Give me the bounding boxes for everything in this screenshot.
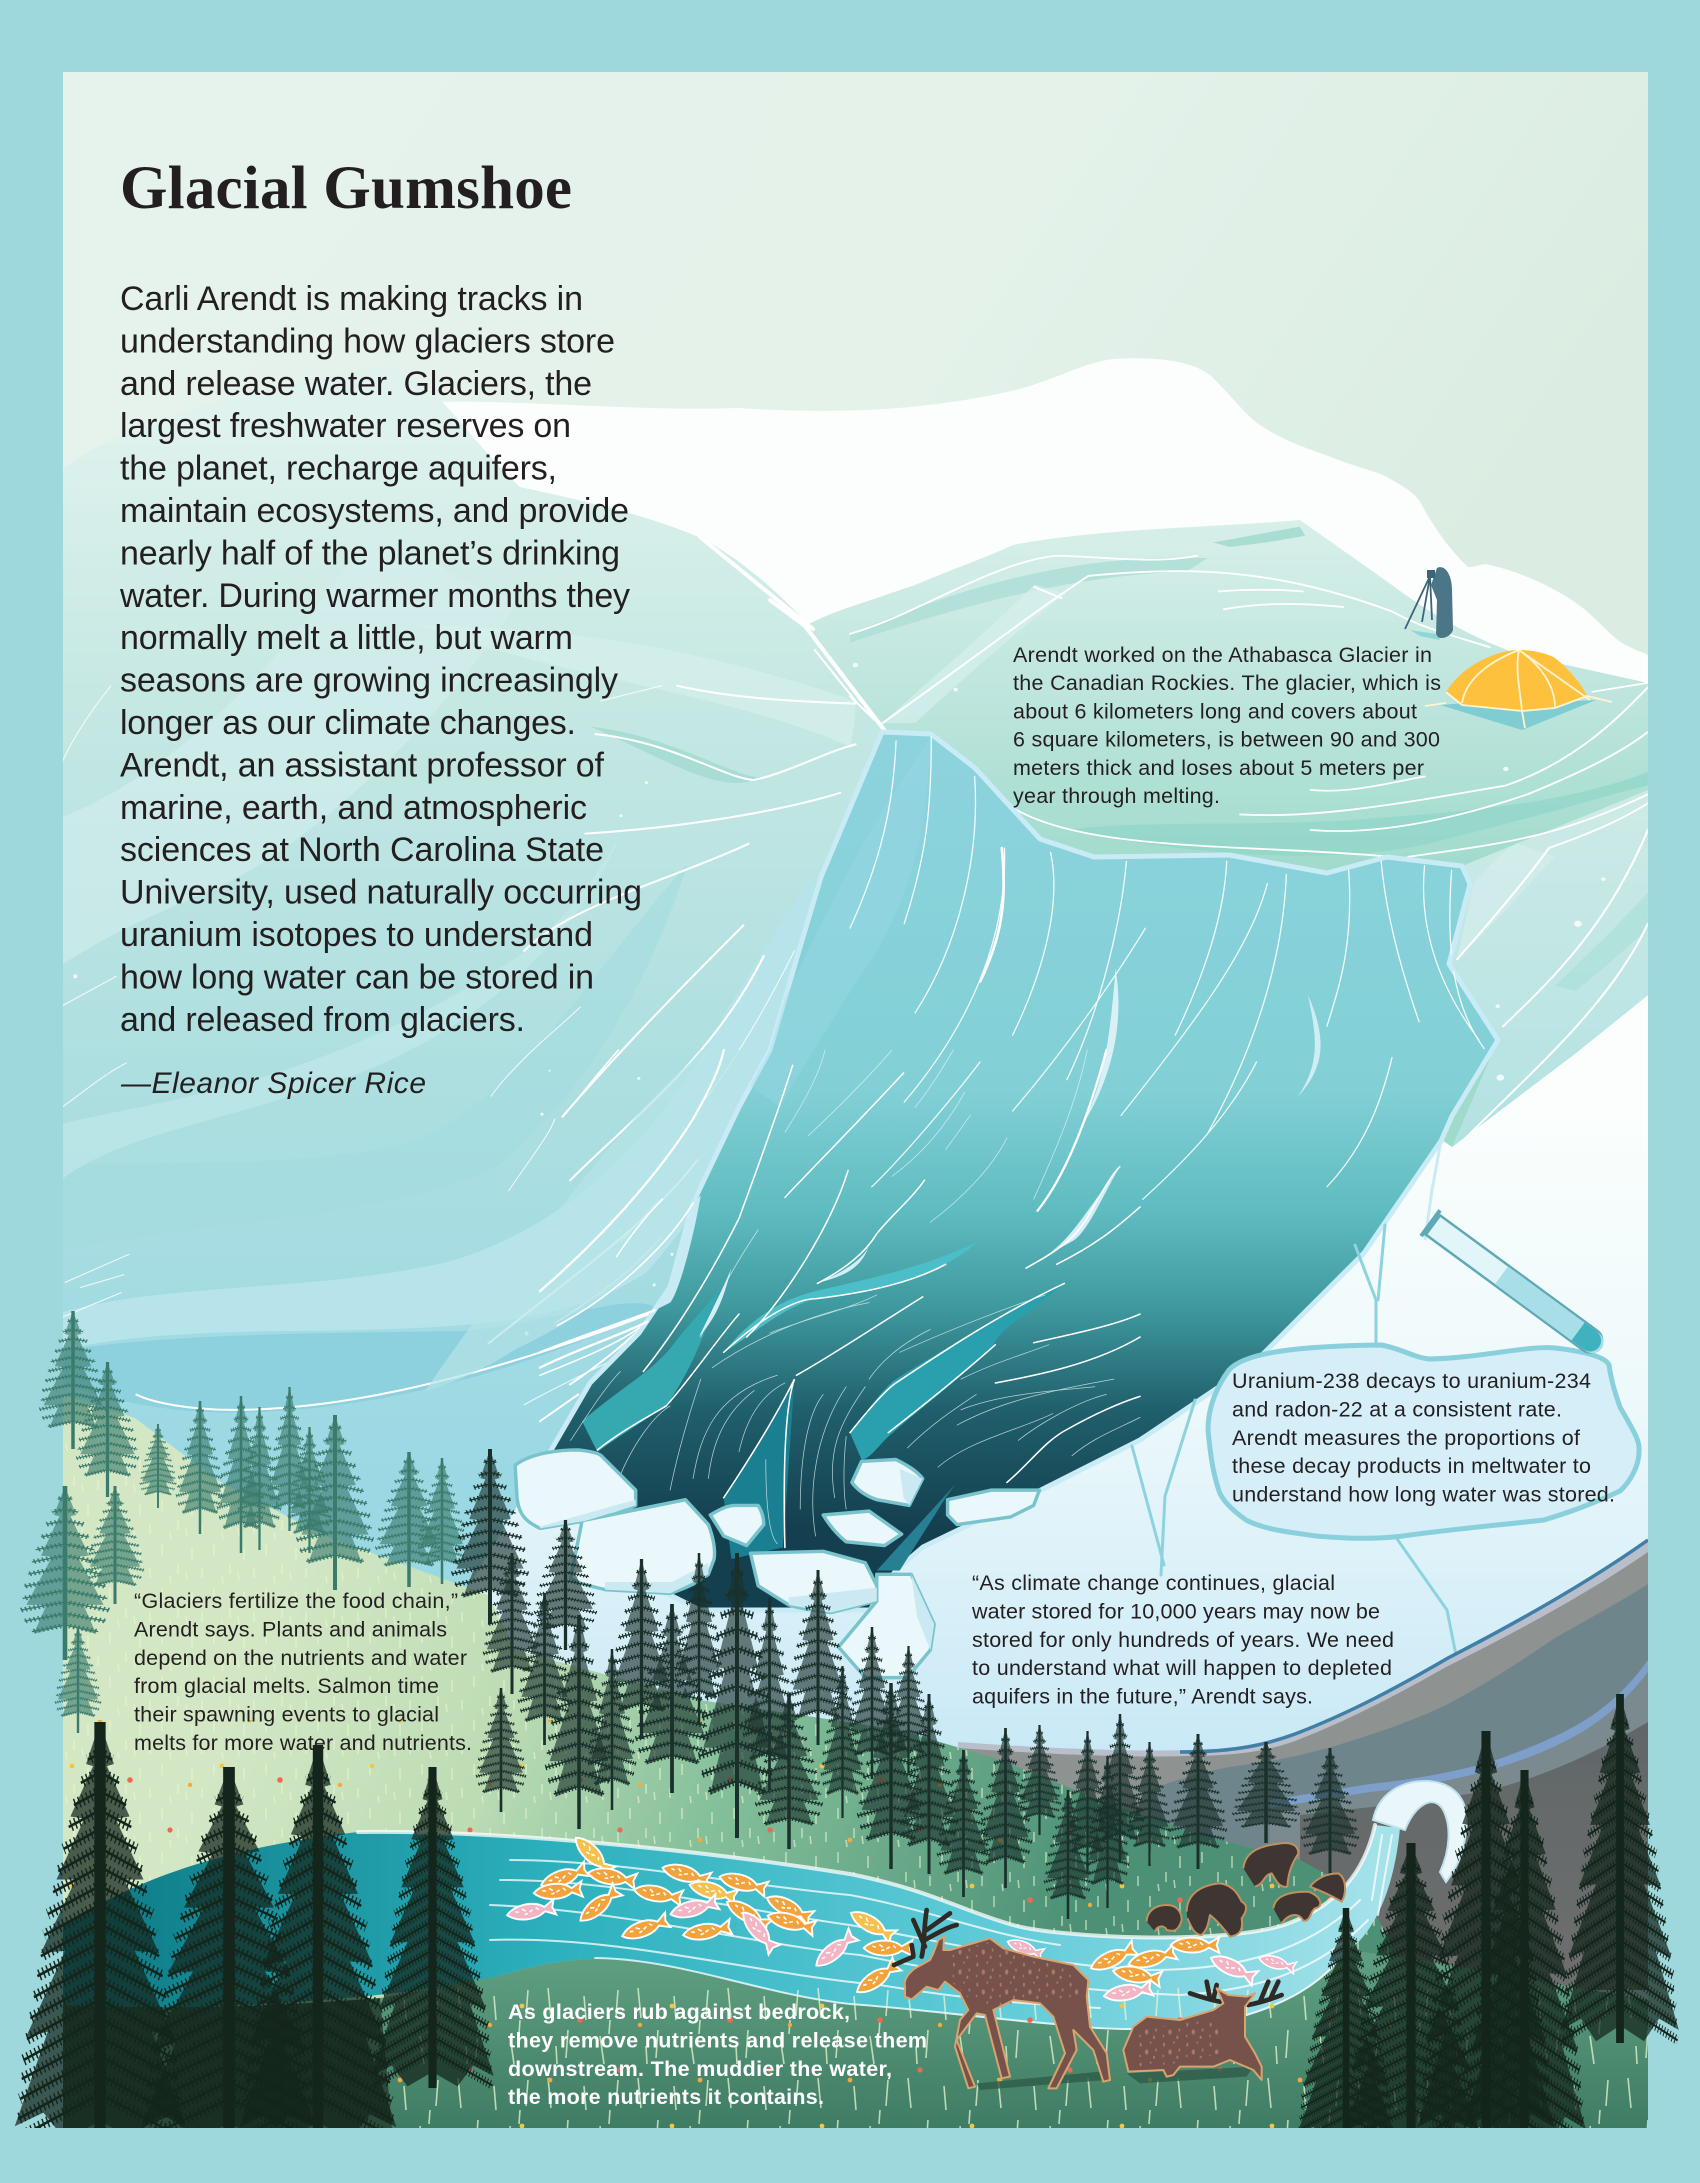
intro text block: maintain ecosystems, and provide [120, 492, 629, 530]
right glacier flank [1449, 790, 1648, 1147]
intro text block: understanding how glaciers store [120, 322, 615, 360]
caption: food chain quote: Arendt says. Plants and animals [134, 1617, 447, 1641]
right glacier surface [805, 520, 1648, 1147]
right glacier crevasses [850, 527, 1648, 1147]
lower ice wall lobes and streaks [425, 1050, 1140, 1570]
intro text block: Carli Arendt is making tracks in [120, 280, 583, 318]
rock strata [958, 1539, 1648, 1990]
intro text block: longer as our climate changes. [120, 704, 576, 742]
caption: food chain quote: “Glaciers fertilize the food chain,” [134, 1589, 458, 1613]
intro text block: water. During warmer months they [119, 577, 630, 615]
dark undergrowth beneath left trees [63, 1998, 392, 2128]
intro text block: sciences at North Carolina State [120, 831, 604, 869]
intro text block: seasons are growing increasingly [120, 662, 618, 700]
caption: Athabasca Glacier [1013, 643, 1441, 808]
lying moose [1123, 1988, 1262, 2080]
sky [63, 72, 1648, 656]
intro text block: University, used naturally occurring [120, 874, 642, 912]
icon: photographer with tripod [1405, 567, 1453, 640]
caption: Athabasca Glacier: the Canadian Rockies. The glacier, which is [1013, 671, 1441, 695]
caption: nutrients in white: the more nutrients it contains. [508, 2085, 824, 2109]
glacier ridge line [700, 537, 885, 731]
caption: nutrients in white [508, 2000, 927, 2109]
lower riverbank [380, 1950, 1648, 2128]
caption: nutrients in white: downstream. The muddier the water, [508, 2057, 892, 2081]
caption: uranium decay: Uranium-238 decays to uranium-234 [1232, 1369, 1591, 1393]
standing moose [905, 1937, 1110, 2088]
lying moose spots [1133, 2017, 1220, 2067]
caption: uranium decay: these decay products in meltwater to [1232, 1454, 1591, 1478]
byline: —Eleanor Spicer Rice [120, 1067, 426, 1100]
ice chunks [515, 1450, 1039, 1678]
mid-ground forest [452, 1449, 1359, 1919]
caption: climate change quote: to understand what will happen to depleted [972, 1656, 1392, 1680]
caption: food chain quote [134, 1589, 472, 1755]
caption: food chain quote: their spawning events to glacial [134, 1703, 439, 1727]
caption: Athabasca Glacier: year through melting. [1013, 784, 1220, 808]
salmon in the river [506, 1832, 1297, 2004]
icon: yellow tent [1425, 650, 1612, 730]
foreground spruce trees [15, 1694, 1679, 2143]
tributary cracks below the ice [1132, 1225, 1457, 1660]
title: Glacial Gumshoe [120, 155, 572, 222]
caption: climate change quote: aquifers in the future,” Arendt says. [972, 1685, 1313, 1709]
icon: waterfall spout [1373, 1781, 1467, 1882]
wildflowers on hillside [70, 1720, 1332, 2006]
main ice wall [550, 732, 1498, 1610]
intro text block [119, 280, 642, 1039]
callout outline: uranium decay [1208, 1345, 1639, 1538]
ground and hillside [63, 1396, 1398, 2006]
intro text block: and release water. Glaciers, the [120, 365, 592, 403]
foreground grass blades [395, 1985, 1650, 2128]
intro text block: the planet, recharge aquifers, [120, 450, 557, 488]
icon: test tube [1421, 1210, 1611, 1362]
caption: uranium decay: Arendt measures the proportions of [1232, 1426, 1580, 1450]
intro text block: largest freshwater reserves on [120, 407, 571, 445]
upper ice wall streaks [742, 736, 1484, 1199]
left glacier [63, 366, 885, 1600]
grass texture on hillside [66, 1440, 1389, 1972]
caption: uranium decay [1232, 1369, 1615, 1507]
pale ice drips off the wall [1425, 1141, 1441, 1240]
intro text block: Arendt, an assistant professor of [120, 746, 605, 784]
moose pair [894, 1910, 1282, 2090]
intro text block: uranium isotopes to understand [120, 916, 593, 954]
caption: climate change quote: water stored for 10,000 years may now be [971, 1599, 1380, 1623]
intro text block: marine, earth, and atmospheric [120, 789, 587, 827]
ice chunk shading [540, 1469, 934, 1650]
caption: Athabasca Glacier: about 6 kilometers long and covers about [1013, 699, 1417, 723]
standing moose spots [947, 1942, 1083, 2007]
river [63, 1825, 1400, 2030]
moose shadows [977, 2067, 1253, 2090]
caption: nutrients in white: they remove nutrients and release them [508, 2028, 927, 2052]
caption: Athabasca Glacier: 6 square kilometers, is between 90 and 300 [1013, 728, 1440, 752]
bear group [1147, 1843, 1345, 1937]
caption: nutrients in white: As glaciers rub against bedrock, [508, 2000, 850, 2024]
antlers [894, 1910, 1282, 2005]
caption: uranium decay: understand how long water was stored. [1232, 1483, 1615, 1507]
caption: Athabasca Glacier: Arendt worked on the Athabasca Glacier in [1013, 643, 1432, 667]
caption: climate change quote: stored for only hundreds of years. We need [972, 1628, 1394, 1652]
snowfield and mountain behind the glacier [442, 358, 1648, 2000]
caption: food chain quote: melts for more water and nutrients. [134, 1731, 472, 1755]
pale hillside trees [21, 1311, 466, 1733]
intro text block: nearly half of the planet’s drinking [120, 534, 620, 572]
left glacier bands and crevasses [60, 522, 856, 1412]
intro text block: normally melt a little, but warm [120, 619, 573, 657]
caption: climate change quote [971, 1571, 1394, 1709]
caption: food chain quote: depend on the nutrients and water [134, 1646, 467, 1670]
caption: uranium decay: and radon-22 at a consistent rate. [1232, 1397, 1562, 1421]
intro text block: and released from glaciers. [120, 1001, 525, 1039]
caption: food chain quote: from glacial melts. Salmon time [134, 1674, 439, 1698]
caption: Athabasca Glacier: meters thick and loses about 5 meters per [1013, 756, 1424, 780]
caption: climate change quote: “As climate change continues, glacial [972, 1571, 1335, 1595]
intro text block: how long water can be stored in [120, 958, 594, 996]
foreground wildflowers [395, 2000, 1420, 2128]
